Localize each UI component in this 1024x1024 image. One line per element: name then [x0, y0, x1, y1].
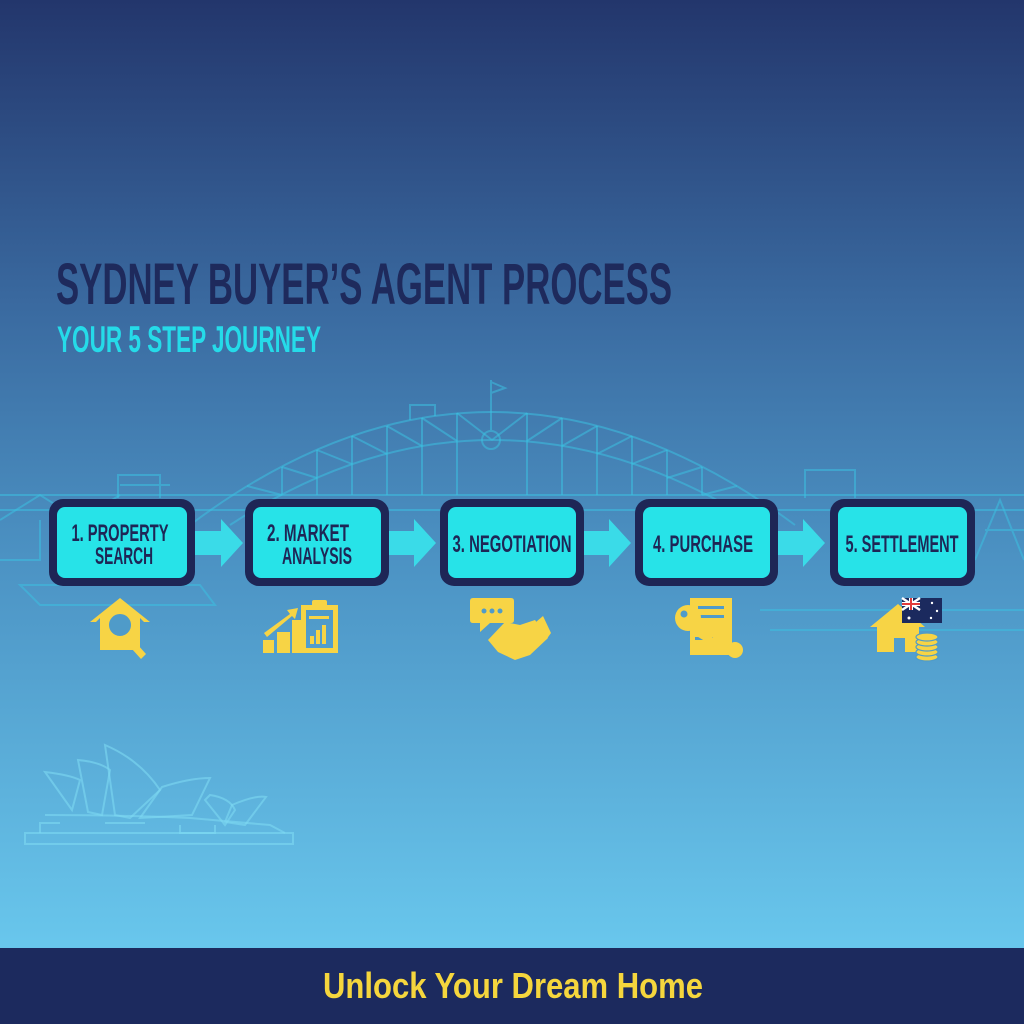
step 4: purchase — [635, 499, 778, 586]
icon: key and contract — [675, 598, 743, 658]
step 2: market analysis: ANALYSIS — [282, 543, 352, 570]
icon: house with magnifier — [90, 598, 150, 659]
step 1: property search — [49, 499, 195, 586]
footer band: Unlock Your Dream Home — [323, 965, 703, 1006]
step 3: negotiation: 3. NEGOTIATION — [452, 531, 572, 558]
illustration: opera house outline — [25, 745, 293, 844]
subtitle: YOUR 5 STEP JOURNEY — [57, 319, 321, 360]
icon: speech bubble and handshake — [470, 598, 551, 660]
step 1: property search: SEARCH — [95, 543, 153, 570]
step 1: property search: 1. PROPERTY — [72, 520, 168, 547]
icon: house, flag and coins — [870, 598, 942, 661]
step 3: negotiation — [440, 499, 584, 586]
step 2: market analysis — [245, 499, 389, 586]
footer band — [0, 948, 1024, 1024]
arrows between steps — [195, 519, 825, 567]
step 4: purchase: 4. PURCHASE — [653, 531, 753, 558]
illustration: harbour bridge outline — [0, 380, 1024, 630]
icon: chart with clipboard — [263, 600, 338, 653]
step 2: market analysis: 2. MARKET — [267, 520, 349, 547]
step 5: settlement — [830, 499, 975, 586]
